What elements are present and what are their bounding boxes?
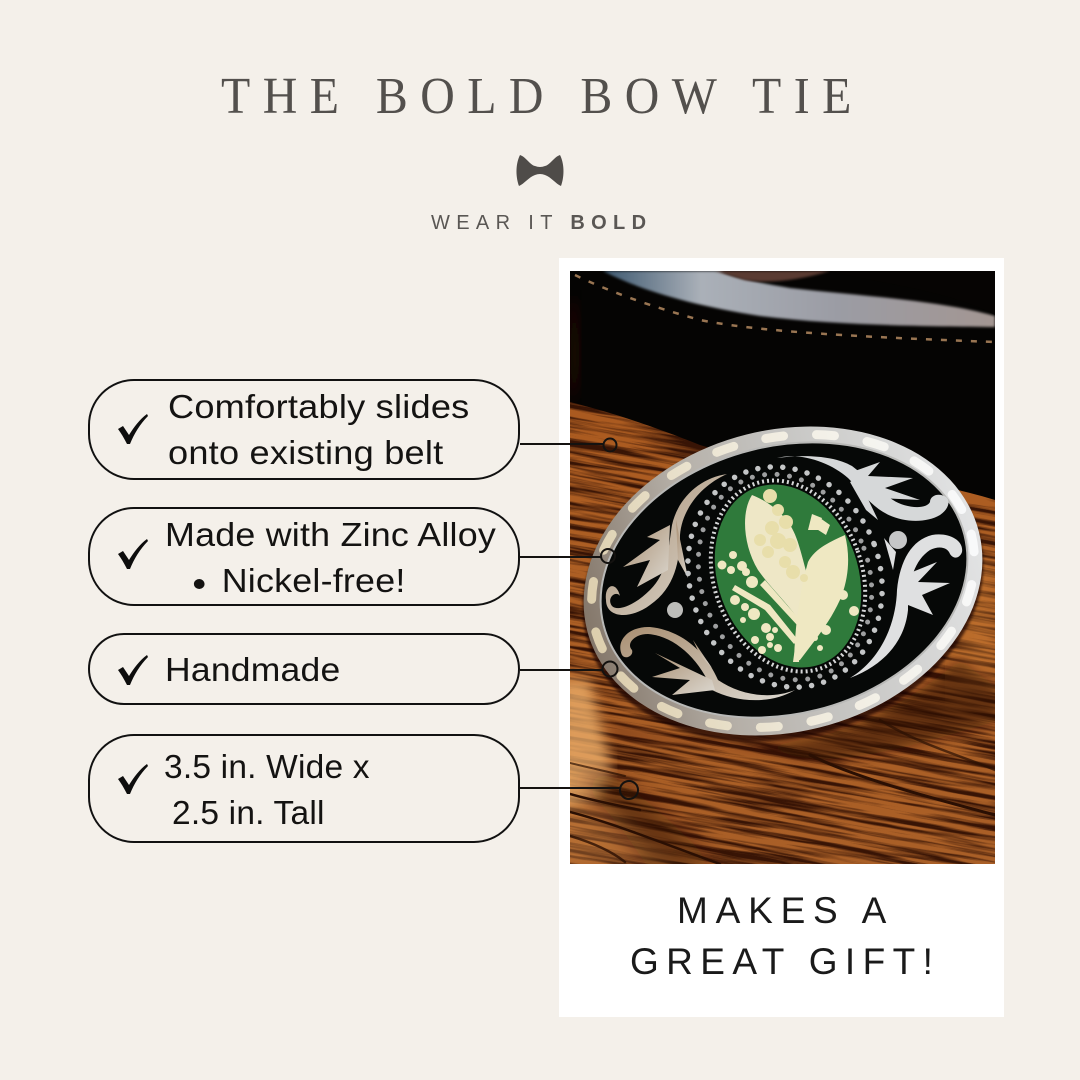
- rope border: [708, 478, 868, 674]
- wood table: [570, 402, 995, 864]
- connector 4: [520, 781, 638, 799]
- check mark 1: [118, 414, 148, 444]
- feature 2 text: Nickel-free!: [222, 563, 406, 600]
- check mark 2: [118, 539, 148, 569]
- bosses: [667, 531, 907, 618]
- feature 1 text: onto existing belt: [168, 435, 443, 472]
- tagline: WEAR IT BOLD: [431, 212, 652, 234]
- title: THE BOLD BOW TIE: [221, 68, 864, 125]
- feature 4 pill: [88, 734, 520, 843]
- product photo: belt buckle on wood: [570, 271, 995, 864]
- feature 2 text: Made with Zinc Alloy: [165, 517, 496, 554]
- bronze scroll lower left: [620, 627, 795, 700]
- green cameo: [714, 484, 862, 668]
- buckle shadow: [581, 514, 985, 743]
- feature 2 pill: [88, 507, 520, 606]
- check mark 3: [118, 655, 148, 685]
- connector 3: [520, 662, 618, 676]
- lily of the valley: [718, 489, 859, 662]
- feature 4 text: 2.5 in. Tall: [172, 795, 325, 832]
- icon: bow tie: [516, 155, 564, 186]
- feature 1 pill: [88, 379, 520, 480]
- feature 3 pill: [88, 633, 520, 705]
- black enamel: [600, 442, 968, 718]
- feature 3 text: Handmade: [165, 652, 340, 689]
- bead rings: [685, 464, 885, 690]
- silver scroll top right: [777, 456, 948, 521]
- check mark 4: [118, 764, 148, 794]
- bronze scroll left: [606, 474, 727, 615]
- caption line 1: MAKES A: [677, 890, 894, 931]
- feature 1 text: Comfortably slides: [168, 389, 469, 426]
- feature 2 text: [165, 517, 496, 600]
- feature 1 text: [168, 389, 469, 472]
- feature 4 text: [164, 749, 370, 832]
- panel: photo card: [559, 258, 1004, 1017]
- connector 1: [520, 438, 616, 452]
- silver scroll right: [850, 534, 962, 678]
- buckle: [581, 426, 985, 743]
- leather belt: [570, 271, 995, 500]
- caption line 2: GREAT GIFT!: [630, 941, 940, 982]
- connector 2: [520, 549, 615, 563]
- silver rim: [584, 426, 982, 736]
- feature 4 text: 3.5 in. Wide x: [164, 749, 370, 786]
